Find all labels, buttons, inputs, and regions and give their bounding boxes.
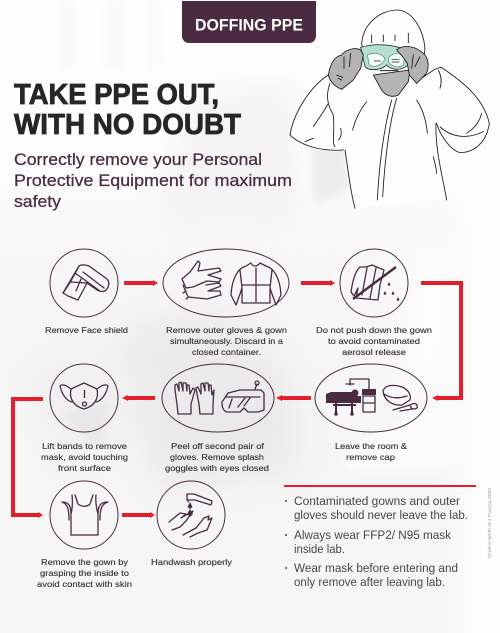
subtitle: Protective Equipment for maximum bbox=[14, 172, 292, 190]
flow arrows bbox=[13, 280, 461, 518]
step 4: lift bands to remove mask: mask, avoid touching bbox=[41, 452, 128, 462]
notes panel: Always wear FFP2/ N95 mask bbox=[294, 528, 452, 542]
step 2: remove outer gloves and gown bbox=[163, 249, 289, 357]
step 5: peel off second gloves and remove goggles: goggles with eyes closed bbox=[165, 463, 269, 473]
notes panel: Wear mask before entering and bbox=[294, 561, 458, 575]
step 7: remove the gown by the inside: avoid contact with skin bbox=[37, 579, 132, 589]
subtitle: Correctly remove your Personal bbox=[14, 151, 262, 169]
badge: doffing PPE: DOFFING PPE bbox=[195, 16, 303, 34]
notes panel: gloves should never leave the lab. bbox=[294, 508, 468, 522]
notes panel: Contaminated gowns and outer bbox=[294, 494, 460, 508]
step 1: remove face shield bbox=[45, 249, 128, 335]
step 6: leave the room and remove cap bbox=[315, 364, 427, 462]
title bbox=[14, 79, 242, 141]
illustration: person adjusting goggles bbox=[290, 10, 489, 208]
step 7: remove the gown by the inside: Remove the gown by bbox=[41, 557, 129, 567]
step 3: do not push down the gown: aerosol release bbox=[342, 347, 406, 357]
step 2: remove outer gloves and gown: Remove outer gloves & gown bbox=[166, 325, 287, 335]
notes panel: inside lab. bbox=[294, 542, 345, 556]
step 4: lift bands to remove mask: Lift bands to remove bbox=[42, 441, 127, 451]
badge: doffing PPE bbox=[182, 1, 316, 43]
subtitle bbox=[14, 151, 292, 211]
step 8: handwash properly: Handwash properly bbox=[151, 557, 233, 567]
step 4: lift bands to remove mask bbox=[41, 364, 128, 473]
title: WITH NO DOUBT bbox=[14, 109, 242, 141]
step 1: remove face shield: Remove Face shield bbox=[45, 325, 128, 335]
step 8: handwash properly bbox=[151, 481, 233, 567]
step 5: peel off second gloves and remove goggles: Peel off second pair of bbox=[171, 441, 265, 451]
mask bbox=[373, 70, 410, 96]
step 5: peel off second gloves and remove goggles: gloves. Remove splash bbox=[170, 452, 264, 462]
credit: Ibrahim Wirth et J Trauma 2020 bbox=[487, 488, 492, 558]
step 2: remove outer gloves and gown: closed container. bbox=[192, 347, 261, 357]
step 3: do not push down the gown: Do not push down the gown bbox=[316, 325, 432, 335]
subtitle: safety bbox=[14, 193, 62, 211]
notes panel: only remove after leaving lab. bbox=[294, 575, 445, 589]
notes panel bbox=[284, 485, 476, 589]
step 4: lift bands to remove mask: front surface bbox=[58, 463, 111, 473]
right glove bbox=[397, 46, 428, 83]
title: TAKE PPE OUT, bbox=[14, 79, 219, 111]
step 3: do not push down the gown bbox=[316, 249, 432, 357]
step 2: remove outer gloves and gown: simultaneously. Discard in a bbox=[170, 336, 283, 346]
step 6: leave the room and remove cap: remove cap bbox=[346, 452, 395, 462]
step 7: remove the gown by the inside: grasping the inside to bbox=[40, 568, 129, 578]
step 7: remove the gown by the inside bbox=[37, 481, 132, 589]
step 6: leave the room and remove cap: Leave the room & bbox=[335, 441, 407, 451]
step 3: do not push down the gown: to avoid contaminated bbox=[328, 336, 420, 346]
goggles bbox=[361, 45, 410, 71]
left glove bbox=[328, 49, 363, 89]
step 5: peel off second gloves and remove goggles bbox=[162, 364, 274, 473]
